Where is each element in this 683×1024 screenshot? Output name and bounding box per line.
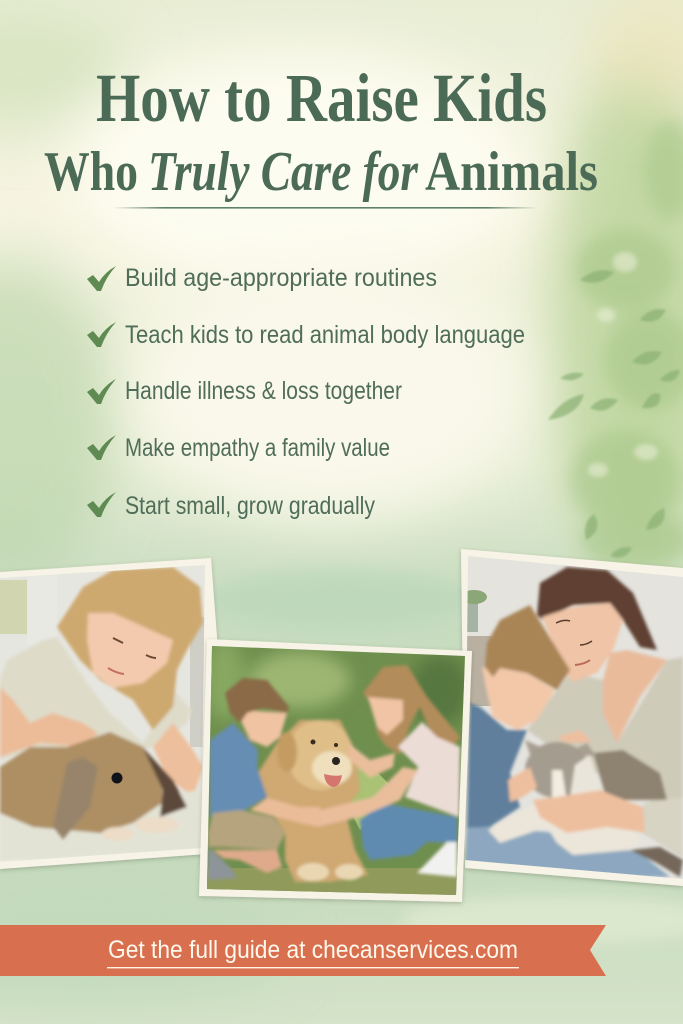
- item 1: Build age-appropriate routines: [125, 264, 437, 292]
- jeans: [465, 827, 670, 877]
- cat: [593, 750, 667, 800]
- title: How to Raise Kids: [96, 60, 547, 136]
- photo: girl and rabbit: [0, 558, 218, 869]
- hands: [533, 790, 650, 833]
- blanket: [0, 790, 203, 862]
- item 2: Teach kids to read animal body language: [125, 321, 525, 349]
- title: Animals: [425, 141, 598, 203]
- checklist: [87, 264, 525, 520]
- title: [44, 60, 598, 203]
- woman hair and face: [537, 567, 657, 650]
- item 4: Make empathy a family value: [125, 434, 390, 462]
- rabbit: [0, 732, 163, 833]
- shirt: [0, 637, 192, 760]
- call-to-action banner: [0, 925, 606, 976]
- foliage on right: [548, 120, 683, 568]
- item 3: Handle illness & loss together: [125, 377, 402, 405]
- girl: [363, 665, 460, 755]
- arms: [0, 687, 98, 757]
- banner text: Get the full guide at checanservices.com: [108, 936, 518, 964]
- boy: [240, 710, 287, 747]
- face: [87, 613, 173, 688]
- title: Who: [44, 141, 138, 203]
- photo: children and golden retriever: [199, 639, 472, 908]
- photo: mother, boy and cat: [460, 549, 683, 886]
- boy face and hair: [482, 667, 555, 730]
- title: Truly Care for: [148, 141, 419, 203]
- boy shirt: [467, 703, 527, 828]
- sweater: [527, 657, 683, 857]
- item 5: Start small, grow gradually: [125, 492, 375, 520]
- dog: [258, 720, 368, 882]
- hair: [57, 567, 203, 730]
